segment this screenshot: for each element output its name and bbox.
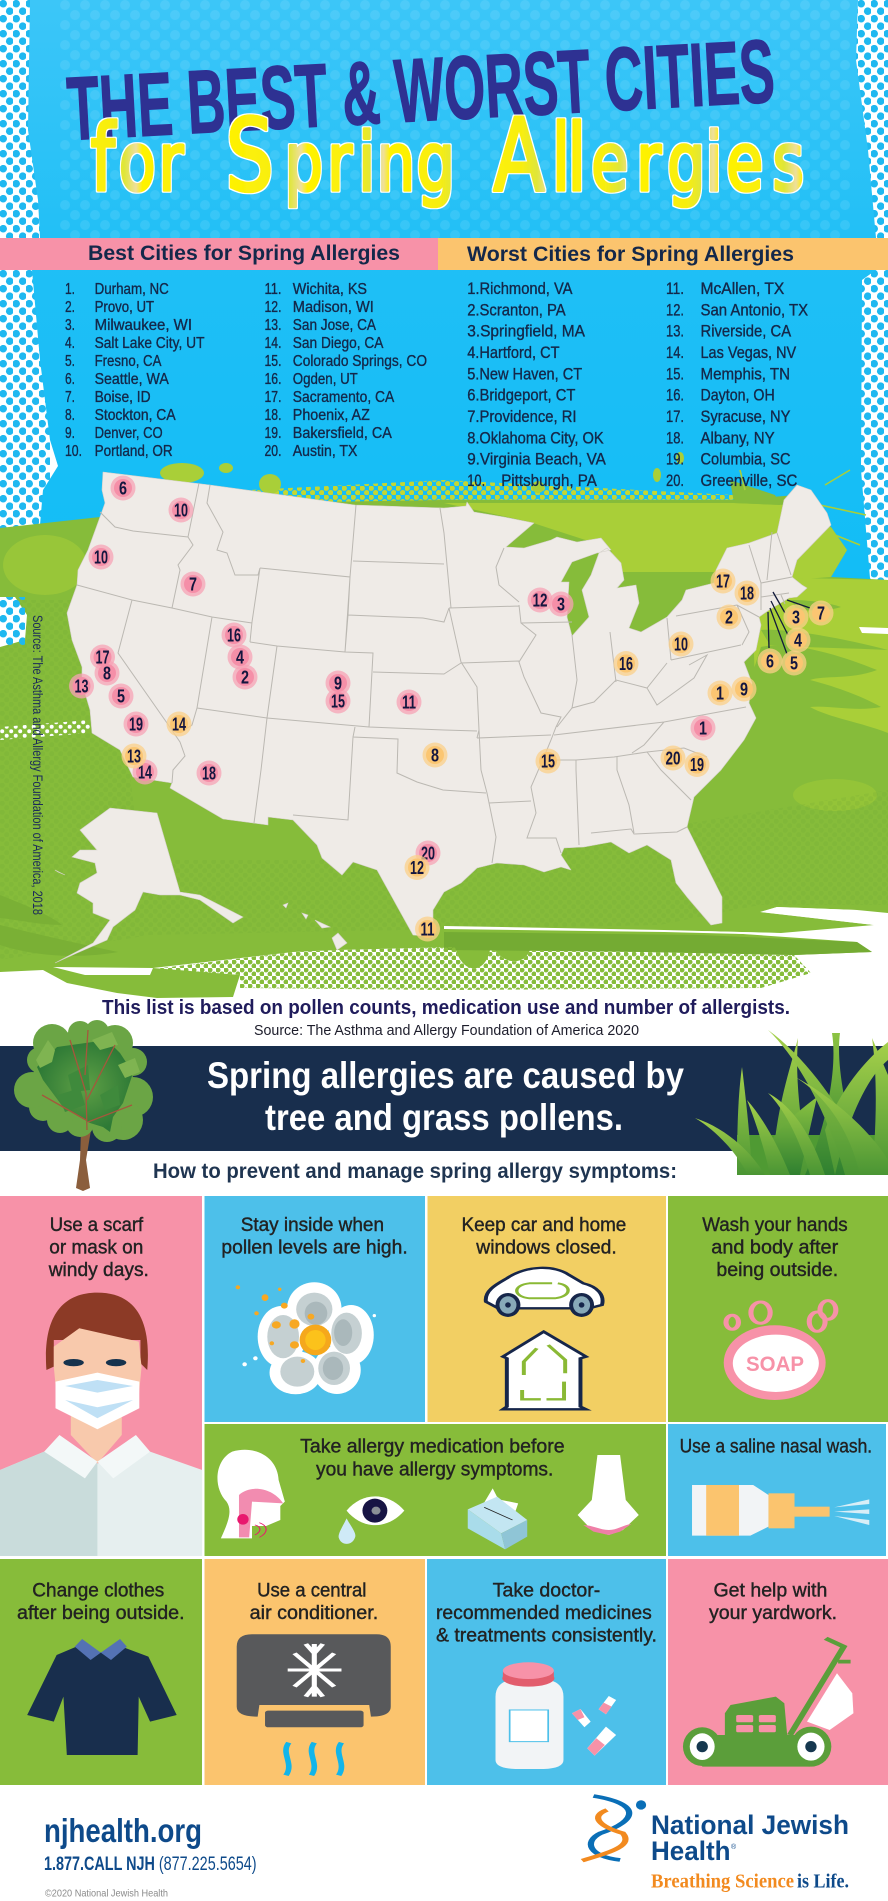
list: best cities 11-20: Sacramento, CA: [293, 389, 395, 406]
best city markers: 15: [331, 692, 345, 712]
panel: wash hands: [668, 1196, 888, 1422]
panel: scarf or mask: Use a scarf: [50, 1214, 144, 1236]
icon: helix: [582, 1796, 646, 1861]
list: best cities 1-10: Denver, CO: [95, 425, 163, 442]
source line: Source: The Asthma and Allergy Foundation of America 2020: [254, 1023, 639, 1039]
icon: soap: [724, 1301, 836, 1400]
list: best cities 1-10: Durham, NC: [95, 281, 169, 298]
heading band: best cities: Best Cities for Spring Allergies: [88, 242, 400, 265]
panel: windows closed: Keep car and home: [462, 1214, 626, 1236]
footer copyright: ©2020 National Jewish Health: [45, 1888, 168, 1900]
panel: doctor recommended medicines: & treatments consistently.: [436, 1625, 657, 1647]
worst city markers: 4: [794, 630, 802, 650]
list: best cities 11-20: San Jose, CA: [293, 317, 377, 334]
best city markers: 19: [129, 714, 143, 734]
list: worst cities 1-10: 10.: [467, 472, 485, 490]
top halftone band: [250, 480, 780, 515]
list: best cities 11-20: Wichita, KS: [293, 281, 367, 298]
worst city markers: 18: [740, 584, 754, 604]
best city markers: 16: [227, 626, 241, 646]
US map: [55, 472, 831, 963]
best city markers: [69, 476, 716, 866]
worst city markers: 19: [690, 755, 704, 775]
best city markers: 20: [421, 844, 435, 864]
list: best cities 11-20: 12.: [264, 299, 282, 316]
best city markers: 14: [138, 762, 152, 782]
lower dark streak: [444, 932, 872, 955]
banner: tree and grass pollens.: [265, 1097, 623, 1138]
heading band: worst cities: Worst Cities for Spring Allergies: [467, 243, 794, 266]
best city markers: 7: [189, 574, 197, 594]
list: worst cities 11-20: 13.: [666, 323, 684, 341]
worst city markers: 6: [766, 652, 774, 672]
panel: saline nasal wash: [668, 1424, 886, 1556]
best city markers: 9: [334, 674, 342, 694]
list: best cities 1-10: Stockton, CA: [95, 407, 176, 424]
list: worst cities 1-10: 4.Hartford, CT: [467, 344, 560, 362]
list: best cities 1-10: 8.: [65, 407, 75, 424]
list: worst cities 11-20: 19.: [666, 451, 684, 469]
best city markers: 1: [699, 718, 707, 738]
best city markers: 5: [117, 686, 125, 706]
logo: National Jewish Health: Health: [651, 1836, 730, 1866]
logo: National Jewish Health: [582, 1796, 849, 1892]
panel: scarf or mask: or mask on: [49, 1236, 143, 1258]
green paint background: [0, 452, 888, 998]
logo: National Jewish Health: ®: [731, 1843, 737, 1851]
panel: yardwork: Get help with: [714, 1580, 827, 1602]
icon: house: [503, 1332, 586, 1409]
best city markers: 6: [119, 478, 127, 498]
worst city markers: 15: [541, 752, 555, 772]
list: best cities 11-20: Austin, TX: [293, 443, 358, 460]
best city markers: 17: [96, 648, 110, 668]
panel: air conditioner: Use a central: [257, 1580, 366, 1602]
white halftone patches: [0, 597, 27, 647]
icon: lawn mower: [683, 1638, 853, 1767]
list: best cities 1-10: 3.: [65, 317, 75, 334]
list: worst cities 11-20: Albany, NY: [700, 429, 775, 447]
soap label: SOAP: [746, 1353, 804, 1376]
darker green streaks on the east: [720, 645, 888, 773]
icon: air conditioner: [237, 1634, 391, 1775]
banner: [0, 1046, 888, 1151]
worst city markers: [122, 568, 834, 942]
list: worst cities 11-20: 12.: [666, 301, 684, 319]
panel: change clothes: after being outside.: [17, 1602, 185, 1624]
panel: allergy medication: [204, 1424, 666, 1556]
panel: yardwork: your yardwork.: [709, 1602, 837, 1624]
list: worst cities 1-10: 7.Providence, RI: [467, 408, 576, 426]
best city markers: 2: [241, 668, 249, 688]
panel: change clothes: [0, 1559, 202, 1785]
white wedge: [53, 967, 153, 975]
lake Erie shade: [625, 580, 716, 634]
panel: wash hands: Wash your hands: [702, 1214, 848, 1236]
list: best cities 11-20: Ogden, UT: [293, 371, 358, 388]
best city markers: 13: [74, 676, 88, 696]
list: best cities 11-20: Bakersfield, CA: [293, 425, 392, 442]
panel: stay inside: Stay inside when: [241, 1214, 384, 1236]
list: worst cities 11-20: 14.: [666, 344, 684, 362]
list: worst cities 11-20: Dayton, OH: [700, 387, 775, 405]
list: worst cities 11-20: 17.: [666, 408, 684, 426]
list: worst cities 11-20: Riverside, CA: [700, 323, 791, 341]
Alaska and Hawaii: [55, 808, 347, 963]
best city markers: 11: [402, 692, 416, 712]
paint splashes: [160, 452, 684, 494]
list: best cities 1-10: Provo, UT: [95, 299, 155, 316]
icon: grass: [695, 1030, 888, 1175]
list: best cities 11-20: 17.: [264, 389, 282, 406]
list: best cities 1-10: 9.: [65, 425, 75, 442]
panel: air conditioner: air conditioner.: [250, 1602, 378, 1624]
list: best cities 11-20: [264, 281, 427, 460]
list: worst cities 1-10: [467, 280, 606, 490]
list: best cities 1-10: 2.: [65, 299, 75, 316]
worst city markers: 10: [674, 634, 688, 654]
worst city markers: 16: [619, 654, 633, 674]
list: worst cities 11-20: Memphis, TN: [700, 365, 790, 383]
list: best cities 1-10: 5.: [65, 353, 75, 370]
list: worst cities 11-20: Greenville, SC: [700, 472, 797, 490]
blue sky background: [0, 0, 876, 590]
list: best cities 11-20: 14.: [264, 335, 282, 352]
best city markers: 18: [202, 764, 216, 784]
logo: National Jewish Health: Breathing Science: [651, 1870, 794, 1892]
list: worst cities 11-20: San Antonio, TX: [700, 301, 808, 319]
worst city markers: 20: [666, 748, 680, 768]
list: worst cities 11-20: 11.: [666, 280, 684, 298]
panel: scarf or mask: windy days.: [48, 1259, 149, 1281]
icon: tree: [14, 1020, 153, 1191]
logo: National Jewish Health: National Jewish: [651, 1810, 849, 1840]
list: best cities 1-10: 1.: [65, 281, 75, 298]
icon: nasal spray bottle: [692, 1485, 869, 1536]
worst city markers: 7: [817, 604, 825, 624]
best city markers: 12: [532, 590, 548, 610]
list: worst cities 1-10: Pittsburgh, PA: [501, 472, 597, 490]
left dark streaks: [0, 895, 118, 956]
list: worst cities 11-20: Syracuse, NY: [700, 408, 790, 426]
panel: stay inside: pollen levels are high.: [221, 1236, 408, 1258]
subheading: How to prevent and manage spring allergy symptoms:: [153, 1160, 677, 1183]
list: best cities 11-20: 16.: [264, 371, 282, 388]
worst city markers: 9: [740, 680, 748, 700]
panel: scarf or mask: [0, 1196, 202, 1556]
bottom halftone band: [153, 947, 811, 990]
right white dashes: [760, 907, 874, 925]
worst city markers: 13: [127, 746, 141, 766]
panel: wash hands: being outside.: [716, 1259, 838, 1281]
list: best cities 11-20: Madison, WI: [293, 299, 374, 316]
icon: car: [486, 1268, 603, 1317]
worst city markers: 5: [790, 654, 798, 674]
list: worst cities 11-20: 20.: [666, 472, 684, 490]
list: best cities 1-10: Fresno, CA: [95, 353, 162, 370]
panel: windows closed: [428, 1196, 666, 1422]
heading band: worst cities: [438, 238, 888, 270]
panel: change clothes: Change clothes: [32, 1580, 165, 1602]
icon: shirt: [27, 1639, 177, 1755]
list: best cities 1-10: 7.: [65, 389, 75, 406]
list: best cities 11-20: 18.: [264, 407, 282, 424]
list: best cities 11-20: 13.: [264, 317, 282, 334]
list: worst cities 11-20: Columbia, SC: [700, 451, 791, 469]
lime patches: [3, 535, 87, 595]
logo: National Jewish Health: is Life.: [797, 1870, 849, 1892]
list: worst cities 11-20: Las Vegas, NV: [700, 344, 796, 362]
list: best cities 11-20: 19.: [264, 425, 282, 442]
list: worst cities 1-10: 6.Bridgeport, CT: [467, 387, 575, 405]
list: best cities 1-10: Salt Lake City, UT: [95, 335, 205, 352]
title line 2: for Spring Allergies: [91, 97, 804, 214]
title: [65, 22, 804, 214]
worst city markers: 14: [172, 714, 186, 734]
list: worst cities 11-20: 16.: [666, 387, 684, 405]
list: best cities 11-20: Colorado Springs, CO: [293, 353, 427, 370]
list: best cities 11-20: 15.: [264, 353, 282, 370]
heading band: best cities: [0, 238, 438, 270]
halftone background edges: [0, 0, 888, 590]
map source note: Source: The Asthma and Allergy Foundation of America, 2018: [30, 615, 45, 915]
list: best cities 11-20: Phoenix, AZ: [293, 407, 370, 424]
contiguous states: [67, 472, 831, 937]
icon: person with mask: [0, 1293, 202, 1556]
list: worst cities 1-10: 5.New Haven, CT: [467, 365, 582, 383]
list: worst cities 1-10: 3.Springfield, MA: [467, 323, 585, 341]
list: best cities 11-20: 20.: [264, 443, 282, 460]
list: best cities 1-10: 6.: [65, 371, 75, 388]
northeast leader lines: [768, 592, 810, 654]
panel: stay inside: [204, 1196, 425, 1422]
list: best cities 1-10: Seattle, WA: [95, 371, 169, 388]
list: best cities 1-10: Portland, OR: [95, 443, 173, 460]
footer website: njhealth.org: [44, 1812, 202, 1849]
worst city markers: 17: [716, 572, 730, 592]
panel: allergy medication: you have allergy symptoms.: [316, 1459, 553, 1481]
panel: yardwork: [668, 1559, 888, 1785]
panel: doctor recommended medicines: Take doctor-: [493, 1580, 600, 1602]
icon: pill bottle and pills: [496, 1662, 616, 1769]
panel: windows closed: windows closed.: [475, 1236, 617, 1258]
panel: wash hands: and body after: [711, 1236, 839, 1258]
panel: doctor recommended medicines: recommended medicines: [436, 1602, 652, 1624]
best city markers: 8: [103, 664, 111, 684]
worst city markers: 12: [410, 858, 424, 878]
footer phone: 1.877.CALL NJH (877.225.5654): [44, 1854, 256, 1875]
list basis statement: This list is based on pollen counts, medication use and number of allergists.: [102, 997, 790, 1019]
list: worst cities 11-20: McAllen, TX: [700, 280, 784, 298]
main green field: [0, 495, 888, 998]
list: worst cities 1-10: 8.Oklahoma City, OK: [467, 429, 604, 447]
worst city markers: 11: [420, 920, 434, 940]
worst city markers: 2: [725, 608, 733, 628]
list: best cities 11-20: 11.: [264, 281, 282, 298]
list: best cities 1-10: 4.: [65, 335, 75, 352]
banner: Spring allergies are caused by: [207, 1055, 684, 1096]
list: worst cities 1-10: 1.Richmond, VA: [467, 280, 572, 298]
list: worst cities 11-20: [666, 280, 808, 490]
best city markers: 4: [236, 648, 244, 668]
worst city markers: 3: [792, 608, 800, 628]
list: best cities 1-10: Milwaukee, WI: [95, 317, 192, 334]
list: worst cities 11-20: 18.: [666, 429, 684, 447]
list: best cities 1-10: Boise, ID: [95, 389, 151, 406]
icon: flower with pollen: [236, 1282, 376, 1394]
list: worst cities 1-10: 2.Scranton, PA: [467, 301, 566, 319]
list: best cities 1-10: [65, 281, 205, 460]
list: worst cities 1-10: 9.Virginia Beach, VA: [467, 451, 606, 469]
worst city markers: 1: [716, 684, 724, 704]
list: best cities 11-20: San Diego, CA: [293, 335, 384, 352]
best city markers: 10: [94, 548, 108, 568]
panel: air conditioner: [204, 1559, 425, 1785]
icons: throat, eye, tissues, nose: [217, 1450, 639, 1549]
list: best cities 1-10: 10.: [65, 443, 82, 460]
worst city markers: 8: [431, 746, 439, 766]
list: worst cities 11-20: 15.: [666, 365, 684, 383]
best city markers: 3: [557, 594, 565, 614]
panel: doctor recommended medicines: [427, 1559, 666, 1785]
best city markers: 10: [174, 500, 188, 520]
dotted texture: [0, 600, 888, 960]
panel: allergy medication: Take allergy medication before: [300, 1436, 565, 1458]
